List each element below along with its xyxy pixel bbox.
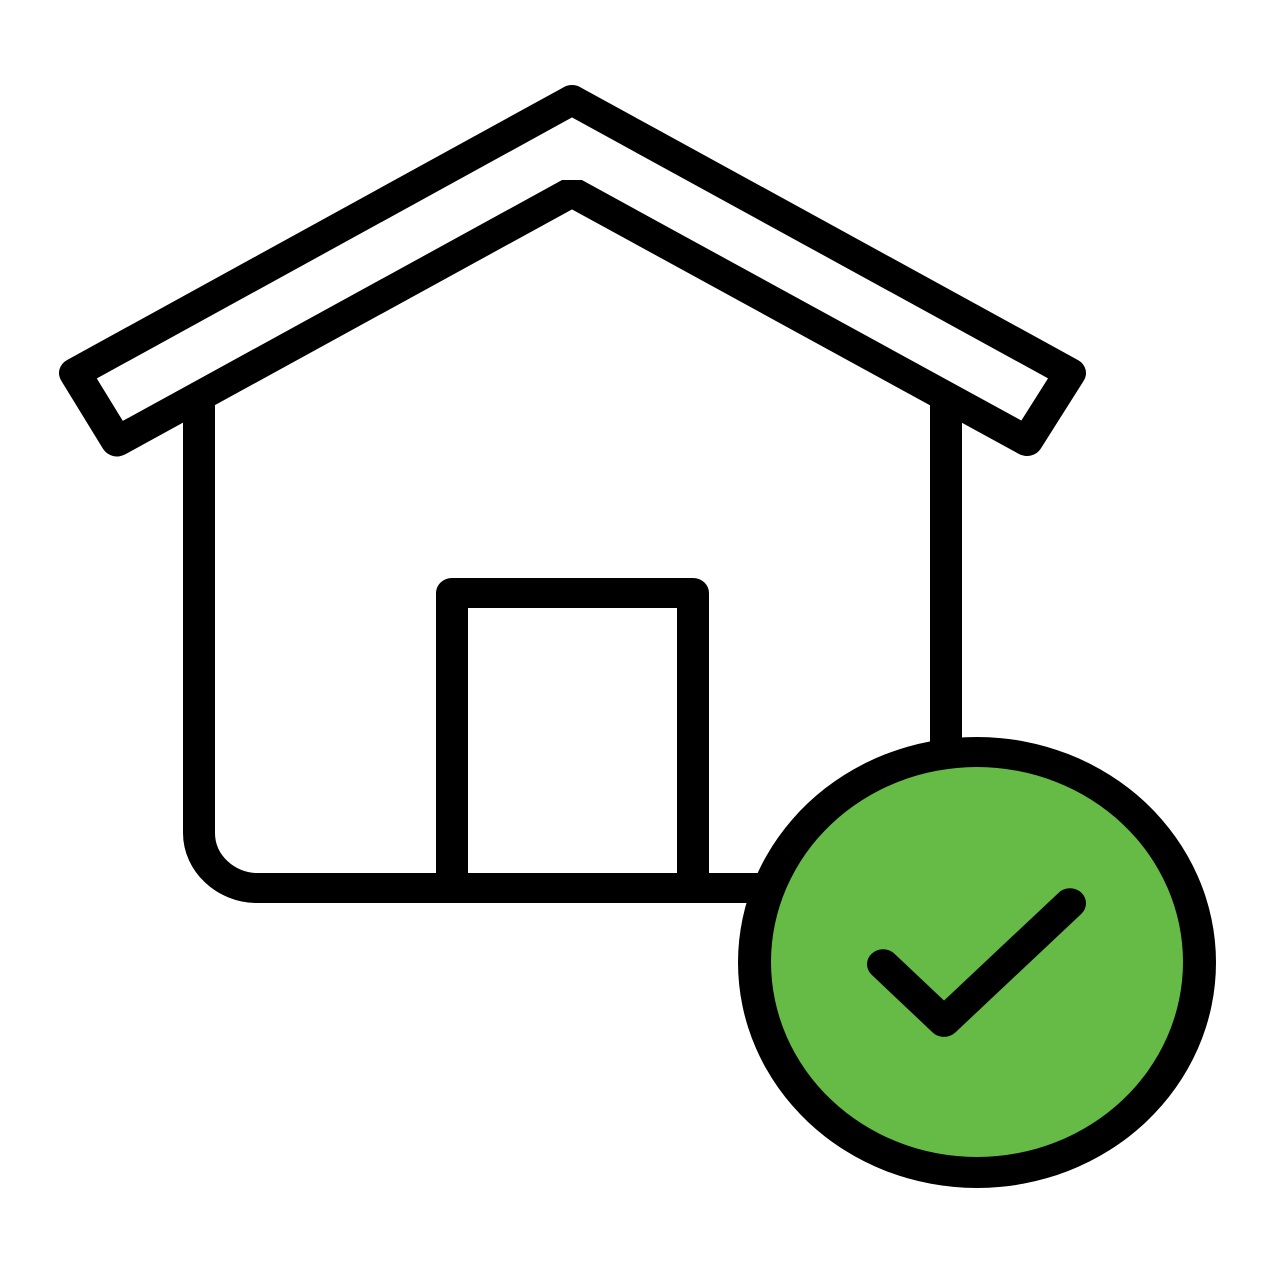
- check mark: [883, 903, 1070, 1022]
- door: [452, 593, 693, 888]
- house walls: [199, 399, 946, 888]
- green check badge: [738, 737, 1216, 1188]
- badge circle: [738, 737, 1216, 1188]
- roof: [75, 100, 1070, 441]
